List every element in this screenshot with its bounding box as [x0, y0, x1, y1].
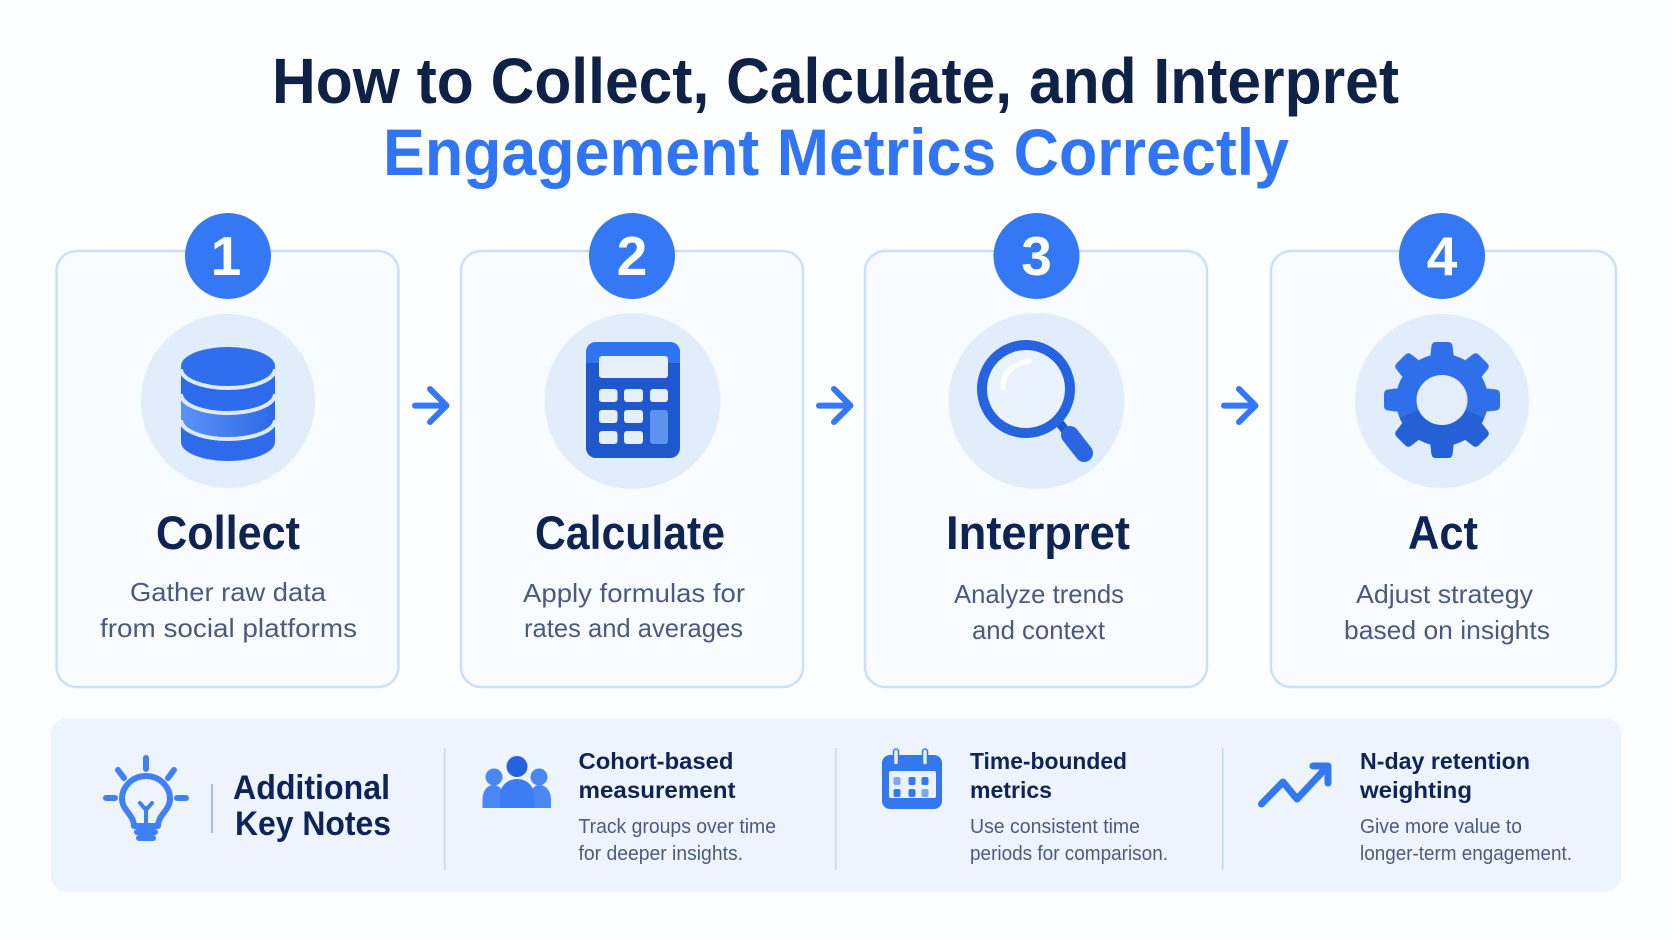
note: cohort-based measurement [578, 748, 776, 865]
note: time-bounded metrics: Time-bounded [970, 748, 1127, 774]
badge 4: 4 [1427, 225, 1458, 287]
heading: additional key notes: Additional [233, 769, 390, 807]
note: n-day retention weighting: longer-term engagement. [1360, 843, 1572, 865]
badge 3 [994, 213, 1080, 299]
heading: additional key notes: Key Notes [235, 805, 391, 843]
note: n-day retention weighting: Give more value to [1360, 816, 1522, 838]
panel: step 3 interpret [865, 213, 1207, 687]
arrow 1 [415, 389, 446, 422]
description: collect: Gather raw data [130, 577, 327, 607]
badge 1 [185, 213, 271, 299]
description: collect [100, 577, 357, 643]
title line 2: Engagement Metrics Correctly [383, 115, 1289, 189]
icon: gear [1355, 314, 1529, 488]
note: n-day retention weighting: weighting [1359, 777, 1472, 803]
icon: people [482, 756, 551, 808]
note: n-day retention weighting [1359, 748, 1572, 865]
heading: act: Act [1408, 506, 1478, 559]
note: n-day retention weighting: N-day retention [1360, 748, 1530, 774]
icon: magnifying glass [948, 313, 1124, 489]
arrow 2 [819, 389, 850, 422]
description: calculate: Apply formulas for [523, 578, 745, 608]
heading: additional key notes [211, 769, 391, 843]
icon: light bulb [106, 758, 186, 838]
description: act: based on insights [1344, 615, 1550, 645]
badge 1: 1 [211, 225, 241, 287]
heading: calculate: Calculate [535, 506, 725, 559]
heading: interpret: Interpret [946, 506, 1130, 559]
badge 2: 2 [617, 225, 647, 287]
note: time-bounded metrics: Use consistent time [970, 816, 1140, 838]
description: act: Adjust strategy [1356, 579, 1533, 609]
badge 4 [1399, 213, 1485, 299]
icon: database [141, 314, 315, 488]
badge 3: 3 [1021, 225, 1052, 287]
description: interpret [954, 579, 1124, 645]
panel: step 2 calculate [461, 213, 803, 687]
note: cohort-based measurement: measurement [578, 777, 736, 803]
note: time-bounded metrics: periods for comparison. [970, 843, 1168, 865]
description: act [1344, 579, 1550, 645]
description: calculate [523, 578, 745, 643]
note: cohort-based measurement: for deeper insights. [578, 843, 743, 865]
title line 1: How to Collect, Calculate, and Interpret [272, 45, 1399, 117]
arrow 3 [1224, 389, 1256, 422]
description: interpret: Analyze trends [954, 579, 1124, 609]
heading: collect: Collect [156, 506, 300, 559]
description: interpret: and context [972, 615, 1106, 645]
icon: calendar [882, 749, 942, 809]
icon: calculator [544, 313, 720, 489]
note: time-bounded metrics: metrics [970, 777, 1052, 803]
panel: step 1 collect [56, 213, 398, 687]
badge 2 [589, 213, 675, 299]
note: cohort-based measurement: Track groups over time [578, 816, 776, 838]
note: cohort-based measurement: Cohort-based [578, 748, 734, 774]
panel: step 4 act [1271, 213, 1616, 687]
description: collect: from social platforms [100, 613, 357, 643]
panel: additional key notes [51, 718, 1621, 892]
note: time-bounded metrics [970, 748, 1168, 865]
icon: trending up arrow [1262, 766, 1328, 804]
description: calculate: rates and averages [524, 613, 743, 643]
title [272, 45, 1399, 189]
